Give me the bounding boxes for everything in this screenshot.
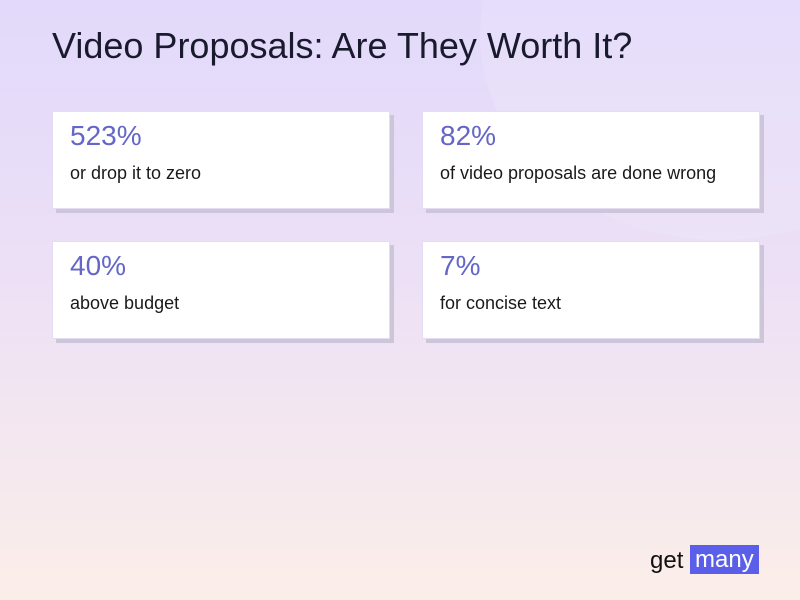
card: 82% (422, 111, 760, 209)
card: 7% (422, 241, 760, 339)
card: 7%: 7% (440, 250, 480, 281)
card: 40%: above budget (70, 293, 179, 313)
card: 7%: for concise text (440, 293, 561, 313)
card: 40% (52, 241, 390, 339)
card: 523% (52, 111, 390, 209)
card: 40%: 40% (70, 250, 126, 281)
logo: many (695, 546, 754, 573)
card: 82%: of video proposals are done wrong (440, 163, 716, 183)
logo: get (650, 547, 683, 574)
logo (650, 545, 759, 574)
card: 523%: 523% (70, 120, 142, 151)
card: 82%: 82% (440, 120, 496, 151)
card: 523%: or drop it to zero (70, 163, 201, 183)
title: Video Proposals: Are They Worth It? (52, 25, 632, 66)
